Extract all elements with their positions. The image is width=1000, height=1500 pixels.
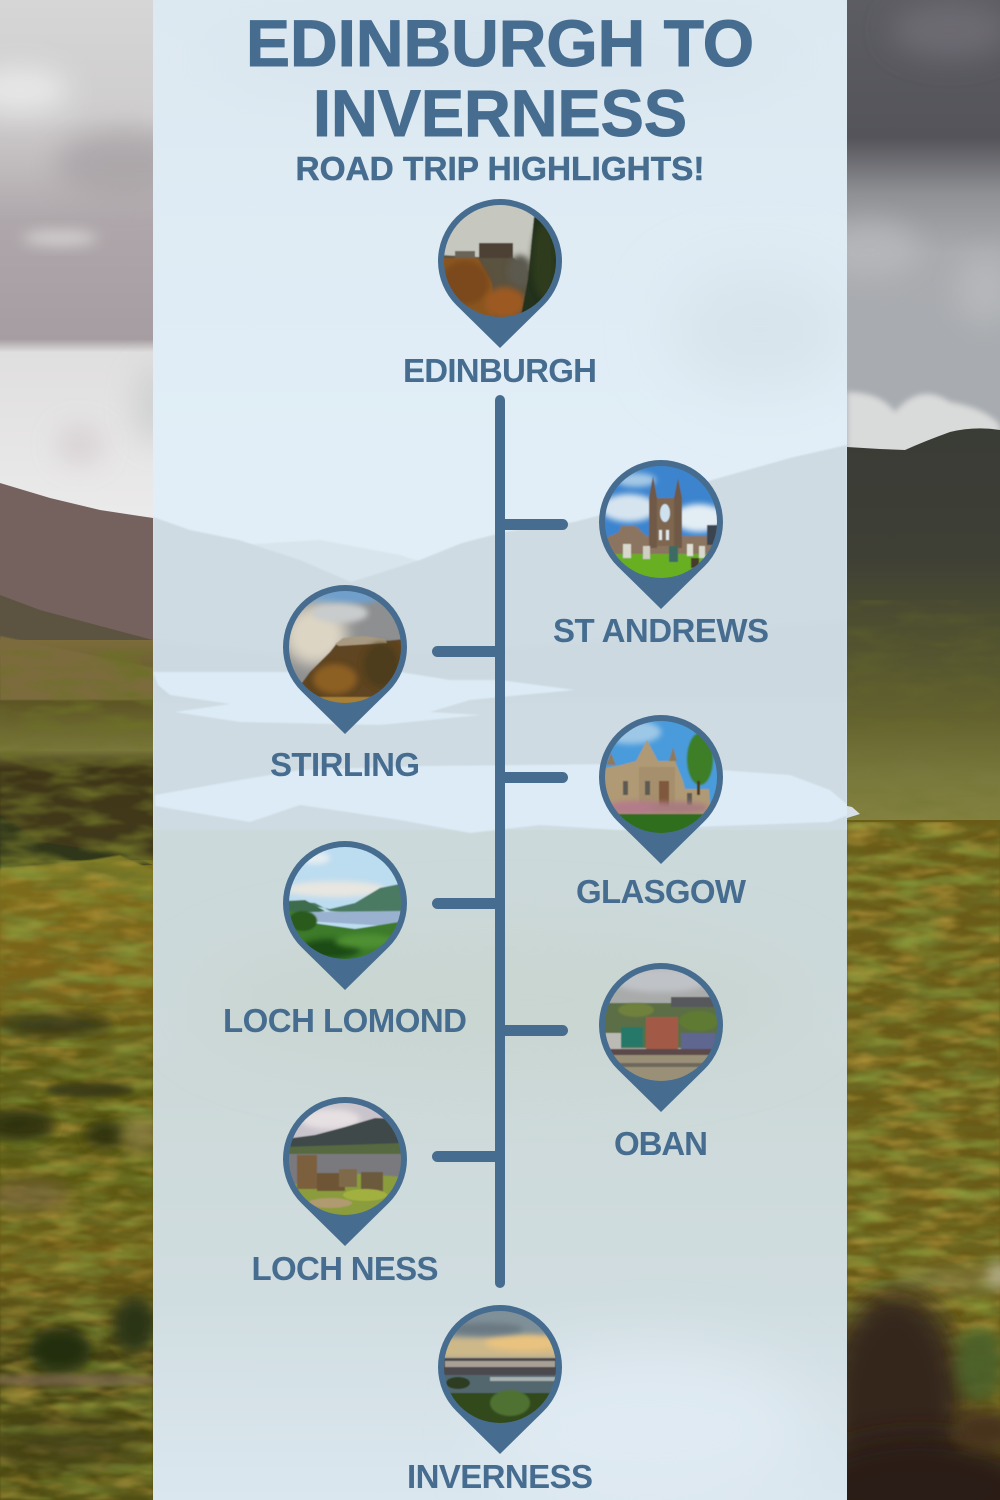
pin: Loch Lomond photo: [283, 841, 407, 990]
pin: Edinburgh castle photo: [438, 199, 562, 348]
pin: Oban harbour photo: [599, 963, 723, 1112]
label: Glasgow: GLASGOW: [576, 873, 747, 910]
pin: Glasgow university photo: [599, 715, 723, 864]
translucent panel with faded loch landscape: [153, 446, 847, 1444]
title: [246, 6, 754, 150]
background photo: right strip of hills and sky: [847, 0, 1000, 1500]
pin: Stirling castle photo: [283, 585, 407, 734]
background photo: left strip of hills and sky: [0, 0, 153, 1500]
pin: Loch Ness and Urquhart Castle photo: [283, 1097, 407, 1246]
subtitle: ROAD TRIP HIGHLIGHTS!: [296, 150, 704, 187]
label: Edinburgh: EDINBURGH: [403, 352, 597, 389]
pin: St Andrews cathedral photo: [599, 460, 725, 609]
title: EDINBURGH TO: [246, 6, 754, 80]
label: Loch Lomond: LOCH LOMOND: [223, 1002, 467, 1039]
title: INVERNESS: [313, 76, 687, 150]
label: Loch Ness: LOCH NESS: [252, 1250, 438, 1287]
pin: Inverness riverside sunset photo: [438, 1305, 565, 1454]
label: Oban: OBAN: [614, 1125, 708, 1162]
label: Stirling: STIRLING: [270, 746, 420, 783]
timeline with branches: [432, 395, 568, 1288]
label: Inverness: INVERNESS: [407, 1458, 593, 1495]
label: St Andrews: ST ANDREWS: [553, 612, 769, 649]
